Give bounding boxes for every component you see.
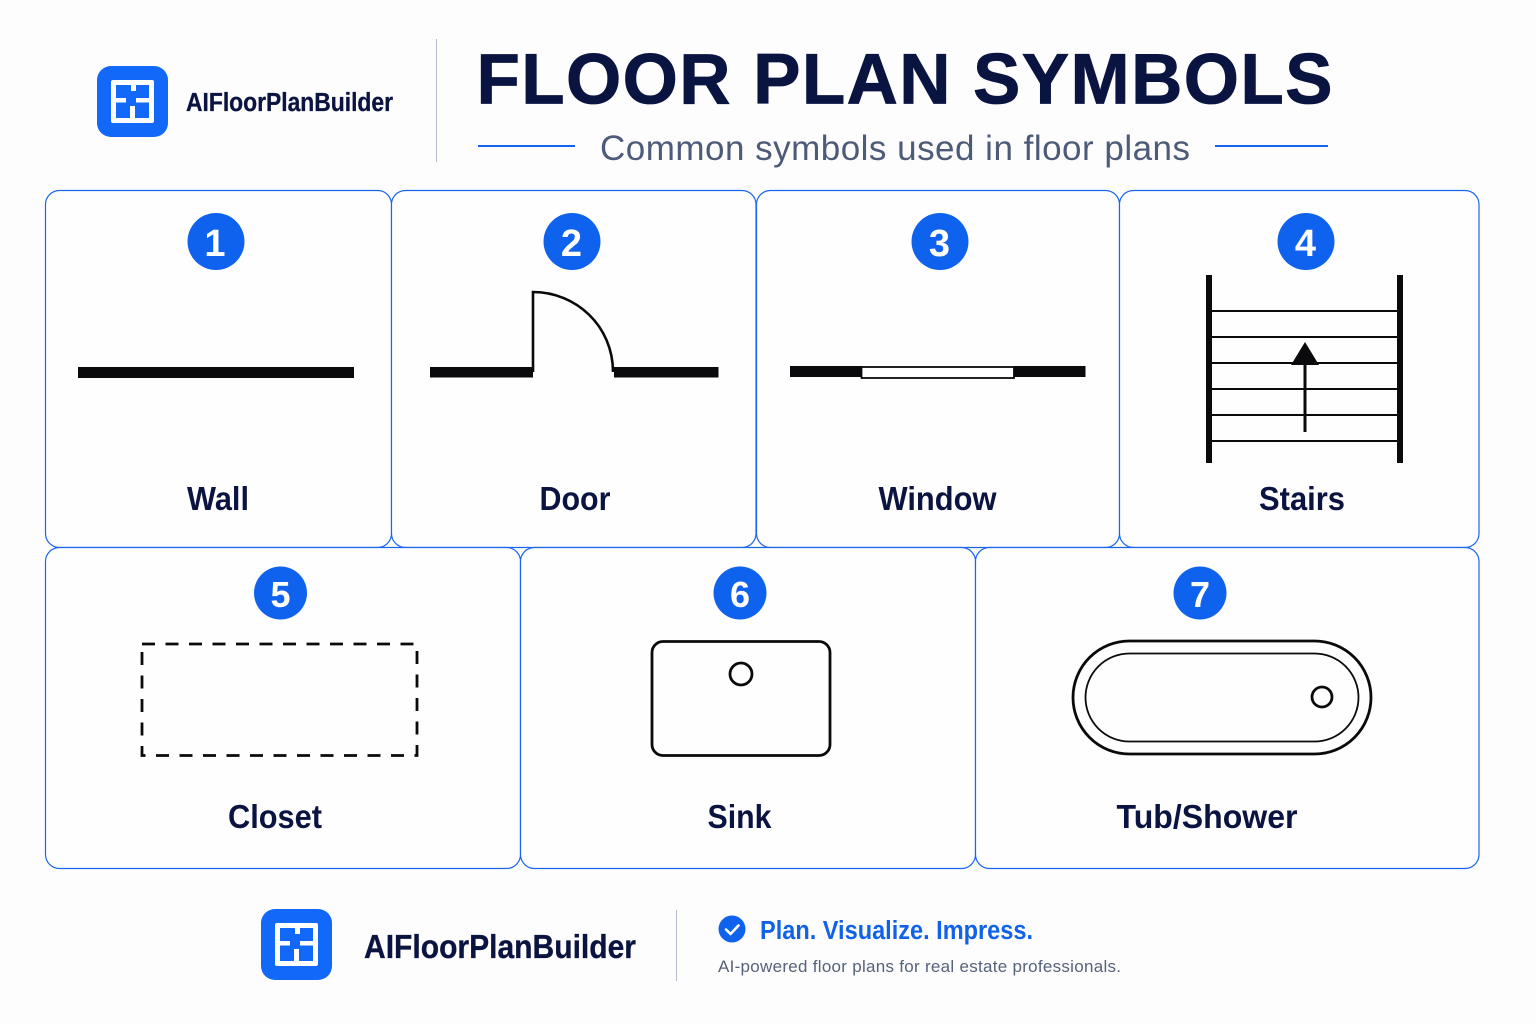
badge 1 <box>188 213 244 270</box>
panel: window <box>756 190 1120 548</box>
badge 6: 6 <box>730 574 750 615</box>
header brand name: AIFloorPlanBuilder <box>186 89 393 117</box>
icon: tub <box>1073 641 1371 754</box>
footer brand name: AIFloorPlanBuilder <box>364 928 636 965</box>
title: FLOOR PLAN SYMBOLS <box>476 40 1332 120</box>
icon: wall <box>78 367 354 378</box>
badge 5: 5 <box>270 574 291 615</box>
tagline: Plan. Visualize. Impress. <box>760 917 1033 945</box>
icon: window <box>790 366 1086 378</box>
label: closet: Closet <box>228 798 322 835</box>
icon: check badge <box>718 916 746 942</box>
badge 4: 4 <box>1295 223 1316 265</box>
panel: wall <box>46 190 392 548</box>
label: door: Door <box>540 480 611 517</box>
icon: closet <box>142 644 417 756</box>
label: stairs: Stairs <box>1259 480 1345 517</box>
badge 3: 3 <box>929 223 950 265</box>
badge 6 <box>714 566 766 620</box>
panel: sink <box>520 548 976 868</box>
icon: stairs <box>1206 275 1403 463</box>
badge 7 <box>1174 566 1226 620</box>
label: tub/shower: Tub/Shower <box>1116 798 1298 835</box>
panel: stairs <box>1120 190 1479 548</box>
icon: door <box>430 292 718 378</box>
badge 3 <box>912 213 968 270</box>
label: window: Window <box>878 480 997 517</box>
subtitle: Common symbols used in floor plans <box>600 129 1190 168</box>
label: wall: Wall <box>187 480 249 517</box>
badge 2: 2 <box>561 223 582 265</box>
footer description: AI-powered floor plans for real estate professionals. <box>718 957 1121 976</box>
header logo <box>97 66 168 137</box>
panel: tub/shower <box>976 548 1479 868</box>
panel: door <box>392 190 756 548</box>
panel: closet <box>46 548 520 868</box>
icon: sink <box>652 642 830 756</box>
label: sink: Sink <box>708 798 772 835</box>
badge 2 <box>544 213 600 270</box>
badge 4 <box>1278 213 1334 270</box>
badge 5 <box>254 566 307 620</box>
footer logo <box>261 909 332 980</box>
badge 1: 1 <box>204 223 226 265</box>
badge 7: 7 <box>1190 574 1210 615</box>
